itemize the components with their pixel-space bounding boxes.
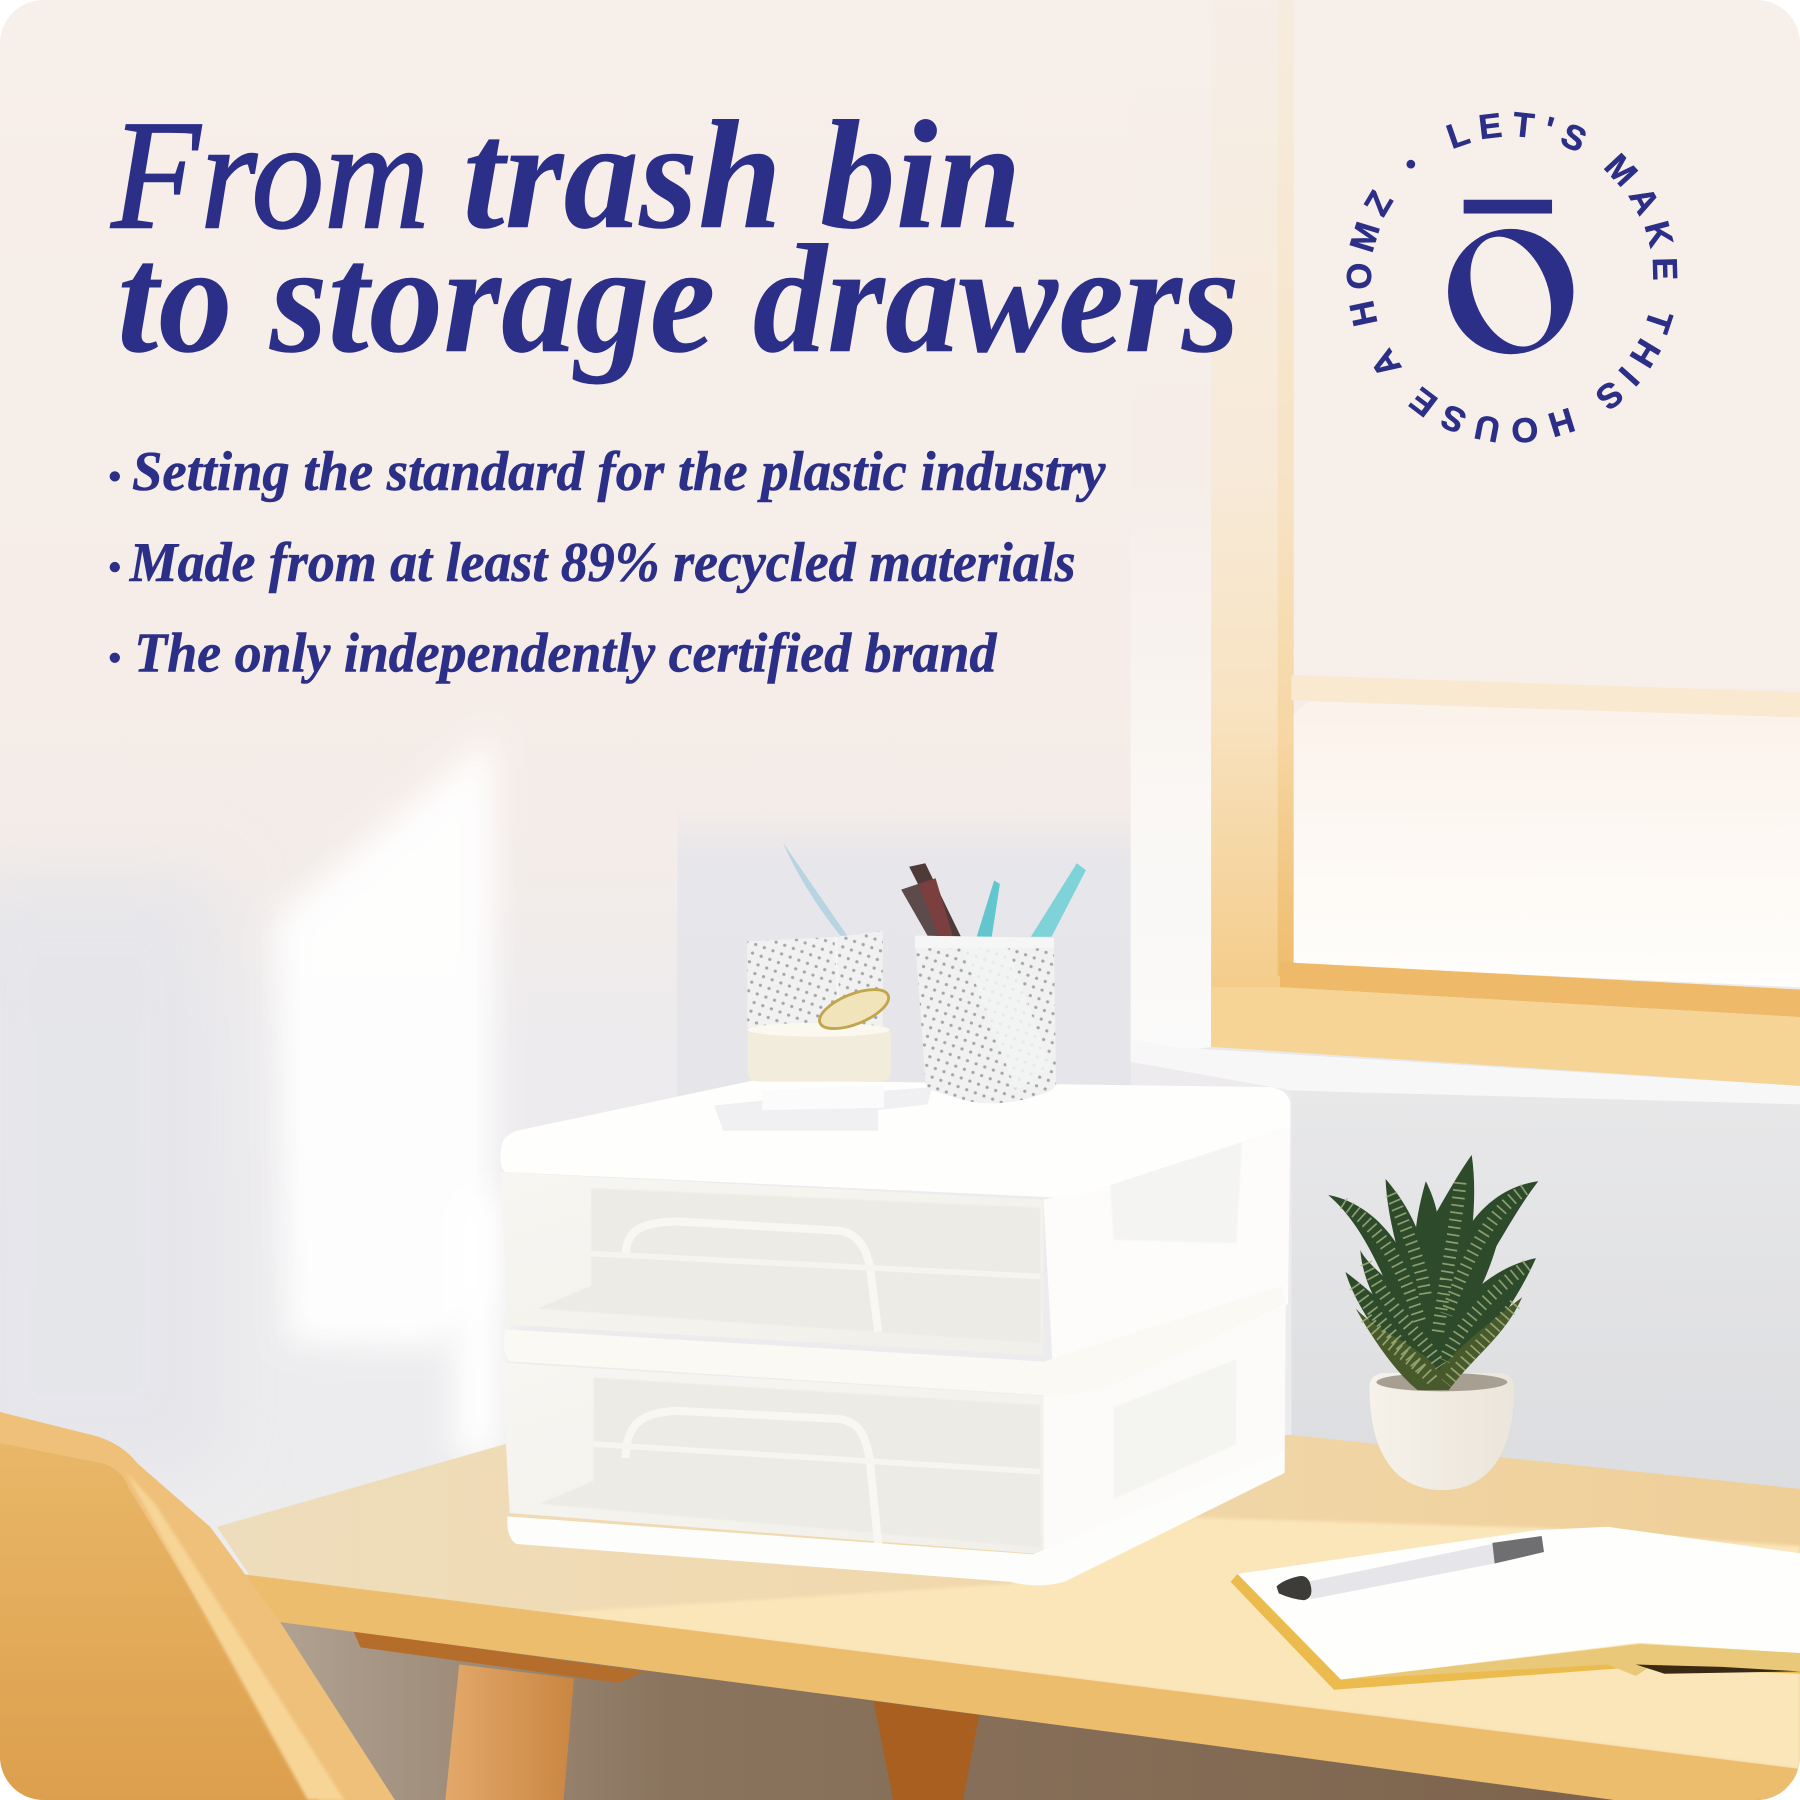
logo bar bbox=[1464, 200, 1552, 214]
bullet list bbox=[110, 441, 1106, 685]
aloe plant bbox=[1328, 1155, 1538, 1390]
upper drawer front bbox=[501, 1172, 1043, 1356]
gold leaf ornament bbox=[814, 981, 894, 1037]
desk sunlight bbox=[549, 1518, 1800, 1769]
drawer base bbox=[507, 1452, 1285, 1585]
feather bbox=[783, 843, 847, 936]
chair bbox=[0, 1412, 395, 1800]
storage drawers bbox=[501, 1080, 1290, 1585]
square perforated holder bbox=[747, 931, 883, 1027]
headline: From bbox=[110, 88, 429, 261]
upper drawer panel line bbox=[591, 1254, 1040, 1277]
plant pot bbox=[1370, 1373, 1514, 1490]
desk leg left bbox=[445, 1665, 574, 1800]
bullet 1: Setting the standard for the plastic industry bbox=[132, 441, 1106, 503]
upper drawer inner bbox=[537, 1188, 1040, 1343]
round perforated cup bbox=[915, 936, 1056, 1103]
ring dot bbox=[1406, 160, 1415, 169]
notebook bbox=[1231, 1527, 1800, 1690]
pens in cup bbox=[901, 863, 1086, 944]
upper drawer body side bbox=[1043, 1126, 1290, 1383]
circular logo badge bbox=[1346, 112, 1678, 443]
desk front edge bbox=[230, 1573, 1800, 1800]
lower drawer front bbox=[502, 1363, 1043, 1554]
logo o bbox=[1448, 225, 1573, 359]
aloe stripes bbox=[1343, 1182, 1527, 1383]
desk leg right bbox=[874, 1701, 979, 1800]
desk top bbox=[217, 1435, 1800, 1769]
desk apron bbox=[354, 1631, 644, 1683]
white card bbox=[762, 1085, 884, 1110]
window bbox=[1211, 0, 1800, 1086]
tape roll bbox=[747, 1023, 891, 1081]
lower drawer inner bbox=[540, 1378, 1040, 1547]
window sill and right wall bbox=[1131, 1039, 1800, 1492]
upper drawer handle bbox=[626, 1221, 878, 1332]
ring text: LET'S MAKE THIS HOUSE A HOMZ bbox=[1346, 112, 1678, 443]
headline bbox=[110, 88, 1240, 385]
bullet 3: The only independently certified brand bbox=[134, 623, 997, 685]
bullet 2: Made from at least 89% recycled materials bbox=[129, 532, 1076, 594]
headline: trash bin bbox=[463, 88, 1022, 261]
wall light and shadow bbox=[0, 735, 1131, 1469]
middle band bbox=[504, 1286, 1286, 1396]
lower drawer panel line bbox=[593, 1444, 1040, 1472]
small tray bbox=[714, 1087, 932, 1131]
upper side window bbox=[1110, 1141, 1242, 1243]
lower side window bbox=[1114, 1359, 1236, 1499]
under desk space bbox=[280, 1622, 1786, 1800]
headline: to storage drawers bbox=[117, 212, 1240, 385]
lower drawer body side bbox=[1043, 1304, 1286, 1582]
lid bbox=[501, 1080, 1290, 1197]
lower drawer handle bbox=[626, 1411, 878, 1544]
white wall column beside window bbox=[1130, 692, 1211, 1048]
pen on notebook bbox=[1277, 1536, 1544, 1600]
